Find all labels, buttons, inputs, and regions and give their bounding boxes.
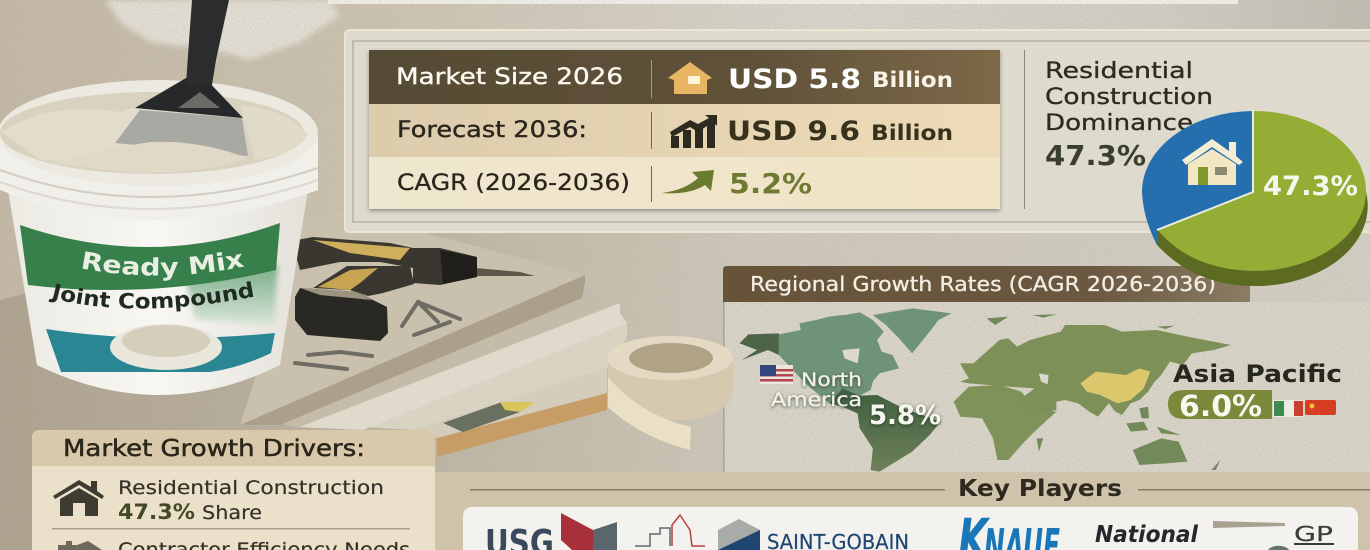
heading: Market Growth Drivers:	[63, 436, 365, 462]
panel: market growth drivers	[32, 430, 435, 550]
row: market size: Market Size 2026	[396, 65, 623, 90]
driver: contractor efficiency	[58, 541, 408, 550]
label teal band	[46, 329, 275, 372]
icon: house	[53, 480, 104, 516]
panel: key player logos	[463, 506, 1358, 550]
pie chart	[1142, 110, 1368, 286]
cordless drill	[295, 237, 535, 341]
icon: arrow	[662, 170, 714, 193]
icon: US flag	[760, 365, 793, 384]
text: residential construction dominance: Residential	[1045, 59, 1193, 84]
label green band	[20, 223, 280, 290]
row: forecast: Forecast 2036:	[397, 118, 587, 143]
pie label: 47.3%	[1263, 171, 1358, 202]
screws	[295, 302, 460, 369]
row: CAGR: CAGR (2026-2036)	[397, 171, 630, 196]
map header: Regional Growth Rates (CAGR 2026-2036)	[750, 272, 1216, 296]
pill: Asia Pacific value: 6.0%	[1179, 389, 1262, 423]
compound fill	[0, 92, 308, 174]
panel: key players background	[435, 472, 1370, 550]
label: North America: North	[801, 369, 862, 391]
text: residential construction dominance	[1045, 59, 1213, 172]
row: market size: USD 5.8	[728, 64, 861, 95]
icon: house on pie	[1182, 139, 1243, 185]
bucket of joint compound	[0, 80, 318, 395]
row: market size	[369, 50, 1000, 104]
driver: residential construction	[119, 480, 382, 520]
row: forecast: Billion	[871, 121, 953, 145]
icon: growth chart	[670, 115, 717, 148]
panel: market stats frame	[345, 30, 1370, 232]
text: residential construction dominance: Dominance	[1045, 111, 1193, 136]
table: stats rows	[369, 50, 1000, 209]
text: residential construction dominance: 47.3%	[1045, 139, 1146, 172]
Ready Mix text: Ready Mix	[82, 251, 244, 281]
map header	[723, 266, 1250, 302]
row: CAGR: 5.2%	[729, 167, 812, 200]
logo: USG	[485, 513, 617, 550]
logo: Saint-Gobain	[718, 519, 909, 550]
spatula	[50, 0, 248, 173]
compound mound	[50, 142, 247, 173]
row: market size: Billion	[872, 68, 953, 92]
label: Asia Pacific: Asia Pacific	[1173, 360, 1342, 388]
row: forecast: USD 9.6	[727, 116, 860, 147]
text: residential construction dominance: Construction	[1045, 85, 1213, 110]
logo: GP: GP	[1294, 522, 1333, 546]
driver: residential construction: Residential Construction	[118, 477, 384, 499]
label bowl	[110, 324, 222, 370]
putty knife on board	[443, 402, 535, 432]
label: North America	[771, 369, 941, 431]
drywall sheets stack	[240, 212, 627, 457]
Joint Compound text: Joint Compound	[48, 281, 254, 312]
icon: house	[668, 62, 712, 94]
label: North America: 5.8%	[869, 400, 941, 431]
world map	[740, 308, 1231, 472]
driver: residential construction: 47.3%	[118, 500, 195, 524]
bucket rim	[0, 80, 318, 220]
logo: GP	[1213, 521, 1334, 550]
label green fade	[185, 265, 278, 325]
icon: Italy flag	[1273, 400, 1303, 417]
icon: China flag	[1305, 400, 1336, 415]
driver: residential construction: Share	[202, 502, 262, 524]
logo: Knauf	[960, 518, 1060, 550]
logo: National: National	[1095, 522, 1199, 548]
row: forecast	[369, 104, 1000, 157]
heading: key players: Key Players	[958, 476, 1122, 502]
bucket body	[8, 190, 308, 395]
label: North America: America	[771, 389, 862, 411]
row: CAGR	[369, 157, 1000, 209]
panel: regional growth map	[723, 266, 1370, 472]
logo: skyline	[635, 515, 705, 546]
tape roll	[607, 336, 733, 450]
